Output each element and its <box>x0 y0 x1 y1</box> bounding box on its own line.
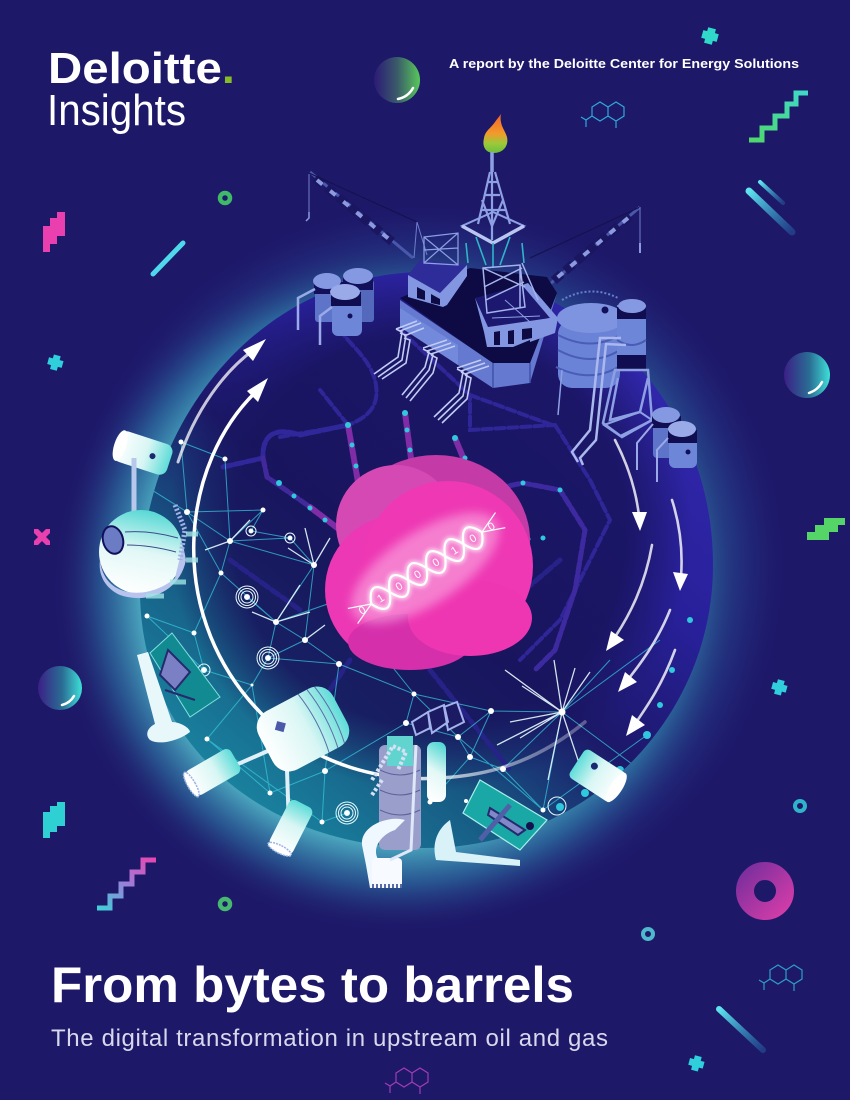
left deck <box>408 233 467 307</box>
subtitle: The digital transformation in upstream oil and gas <box>51 1025 608 1052</box>
deck module lower right <box>435 780 547 866</box>
left crane <box>306 172 427 258</box>
tanks upper left <box>298 268 374 345</box>
binary helix: 0 <box>467 532 479 546</box>
tanks right <box>637 407 697 482</box>
riser pipes <box>374 321 489 423</box>
binary helix: 0 <box>486 520 498 534</box>
right arrows <box>606 440 688 736</box>
binary helix: 0 <box>394 580 405 594</box>
star burst <box>205 520 590 780</box>
right deck <box>475 263 558 347</box>
binary helix <box>346 510 507 626</box>
data network <box>144 440 660 824</box>
storage tank upper right <box>556 291 625 415</box>
binary helix: 1 <box>375 592 387 606</box>
derrick tower <box>462 152 524 268</box>
zigzag stairs <box>97 93 808 908</box>
capsule lines <box>153 182 792 1050</box>
Deloitte Insights logo: Deloitte . <box>48 44 235 93</box>
title: From bytes to barrels <box>51 957 574 1013</box>
concentric signal nodes <box>198 526 566 824</box>
binary helix: 0 <box>412 568 424 582</box>
barrel right <box>568 748 631 805</box>
pipeline network <box>220 328 693 811</box>
decorative spheres <box>38 57 830 710</box>
molecule icons <box>385 102 802 1094</box>
block stairs <box>43 212 845 838</box>
large cylinder <box>181 680 356 859</box>
offshore platform <box>374 233 558 423</box>
binary helix: 1 <box>449 544 461 558</box>
flame <box>483 114 507 153</box>
report byline: A report by the Deloitte Center for Energy Solutions <box>449 56 799 71</box>
barrel left <box>110 429 175 477</box>
ring shapes <box>220 193 805 939</box>
refinery column <box>362 702 464 888</box>
pipeline dots <box>276 410 693 811</box>
binary helix: 0 <box>431 556 442 570</box>
deck module left <box>137 633 220 742</box>
globe glow <box>50 200 790 935</box>
right crane <box>530 207 640 290</box>
globe <box>130 260 730 860</box>
sphere module <box>99 505 198 598</box>
pink data core <box>325 455 533 670</box>
satellite cylinders <box>181 747 314 859</box>
Deloitte Insights logo <box>47 44 235 135</box>
tower upper right <box>572 299 652 465</box>
binary helix: 0 <box>357 604 368 618</box>
Deloitte Insights logo: Insights <box>47 86 186 135</box>
circular ring arrow <box>178 339 585 779</box>
